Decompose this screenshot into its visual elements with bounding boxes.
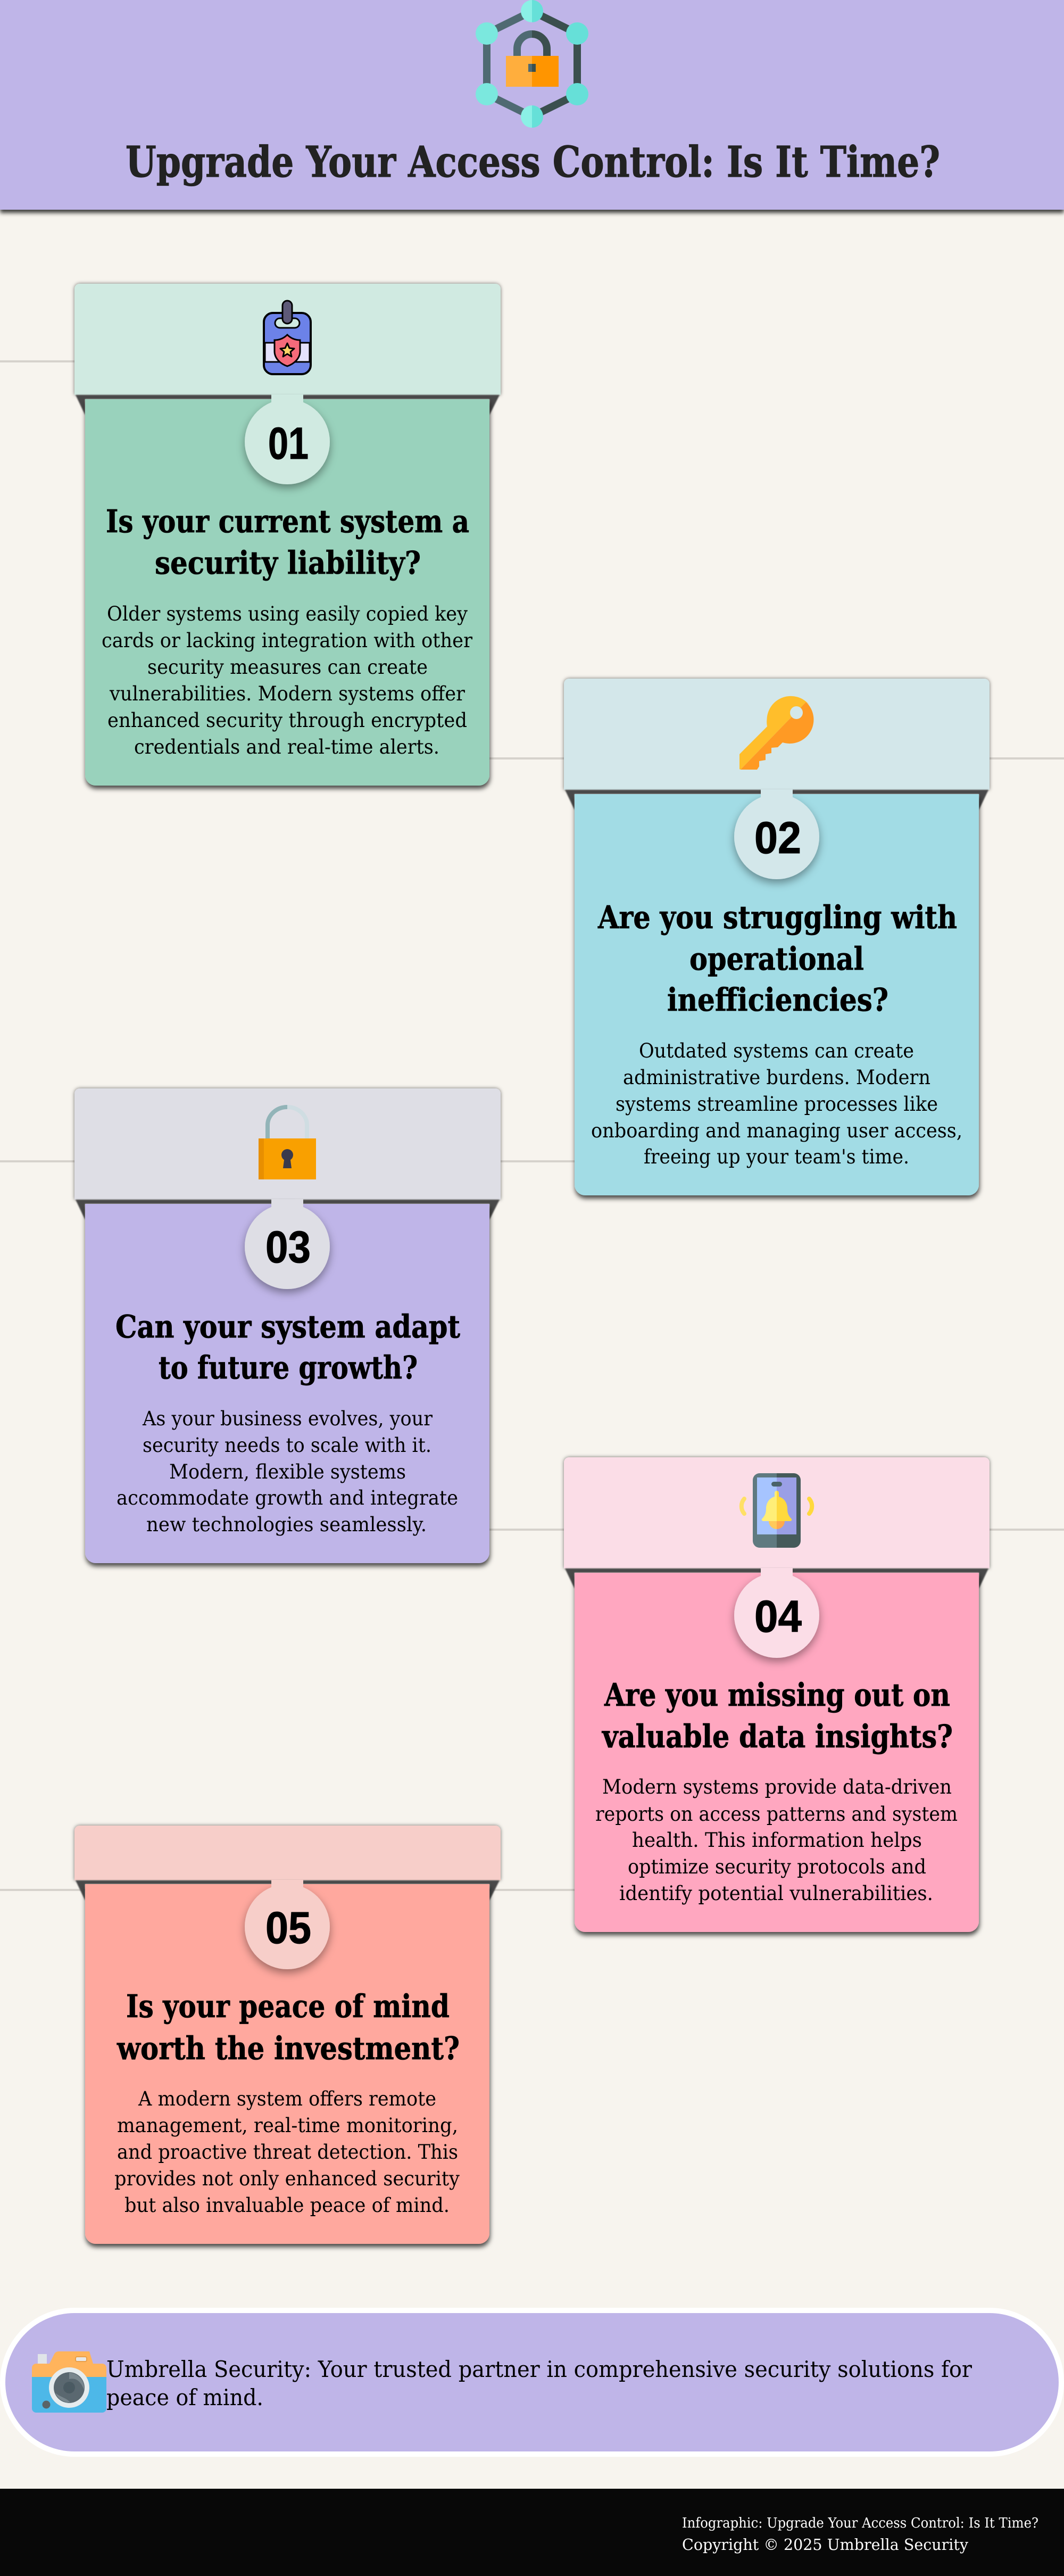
text block bbox=[117, 1407, 458, 1536]
number badge 05: 05 bbox=[265, 1903, 311, 1953]
number badge 02 bbox=[734, 789, 819, 879]
heading: Is your current system a bbox=[106, 503, 469, 540]
text block: management, real-time monitoring, bbox=[117, 2114, 458, 2137]
panel: card 03 bbox=[74, 1088, 501, 1563]
heading bbox=[601, 1677, 953, 1755]
panel: card 04 bbox=[564, 1457, 990, 1932]
text block: accommodate growth and integrate bbox=[117, 1487, 458, 1509]
heading bbox=[117, 1988, 460, 2067]
callout text bbox=[106, 2356, 972, 2410]
text block: but also invaluable peace of mind. bbox=[124, 2194, 450, 2217]
text block: As your business evolves, your bbox=[142, 1407, 433, 1430]
text block: and proactive threat detection. This bbox=[117, 2141, 458, 2164]
heading bbox=[115, 1308, 460, 1386]
panel: card 01 bbox=[74, 284, 501, 786]
text block: provides not only enhanced security bbox=[114, 2167, 460, 2190]
icon: camera bbox=[32, 2351, 106, 2413]
text block: administrative burdens. Modern bbox=[623, 1066, 930, 1089]
text block: Outdated systems can create bbox=[639, 1039, 914, 1062]
text block bbox=[595, 1776, 958, 1905]
text block: Modern systems provide data-driven bbox=[602, 1776, 952, 1798]
text block bbox=[591, 1039, 962, 1168]
heading: worth the investment? bbox=[117, 2030, 460, 2067]
text block: freeing up your team's time. bbox=[644, 1145, 909, 1168]
panel: card 05 bbox=[74, 1826, 501, 2244]
callout text: Umbrella Security: Your trusted partner in comprehensive security solutions for bbox=[106, 2356, 972, 2382]
text block: new technologies seamlessly. bbox=[146, 1513, 427, 1536]
heading bbox=[597, 899, 957, 1018]
panel: header bbox=[0, 0, 1064, 210]
heading: security liability? bbox=[155, 544, 421, 581]
heading: Are you missing out on bbox=[604, 1677, 950, 1713]
icon: padlock bbox=[259, 1107, 316, 1179]
callout text: peace of mind. bbox=[106, 2384, 263, 2410]
number badge 05 bbox=[245, 1880, 330, 1969]
heading: inefficiencies? bbox=[667, 981, 888, 1018]
text block: health. This information helps bbox=[632, 1829, 922, 1852]
text block: security measures can create bbox=[147, 656, 428, 679]
panel: card 02 bbox=[564, 679, 990, 1195]
text block bbox=[114, 2087, 460, 2217]
text block: optimize security protocols and bbox=[628, 1855, 926, 1878]
icon: security badge bbox=[264, 301, 311, 374]
footer bbox=[0, 2489, 1064, 2576]
footer text: source: Infographic: Upgrade Your Access Control: Is It Time? bbox=[682, 2515, 1038, 2531]
heading: valuable data insights? bbox=[601, 1718, 953, 1755]
number badge 03 bbox=[245, 1199, 330, 1289]
number badge 01: 01 bbox=[268, 418, 309, 468]
text block: Older systems using easily copied key bbox=[107, 602, 468, 625]
callout: Umbrella Security bbox=[3, 2310, 1061, 2454]
icon: network padlock bbox=[476, 0, 588, 128]
number badge 03: 03 bbox=[265, 1222, 311, 1272]
heading: Can your system adapt bbox=[115, 1308, 460, 1345]
number badge 04: 04 bbox=[754, 1591, 802, 1641]
text block: Modern, flexible systems bbox=[169, 1460, 406, 1483]
text block bbox=[102, 602, 472, 758]
text block: vulnerabilities. Modern systems offer bbox=[109, 682, 465, 705]
text block: systems streamline processes like bbox=[616, 1093, 938, 1116]
footer text: copyright: Copyright © 2025 Umbrella Security bbox=[682, 2536, 969, 2554]
text block: cards or lacking integration with other bbox=[102, 629, 472, 652]
heading: to future growth? bbox=[159, 1349, 418, 1386]
text block: credentials and real-time alerts. bbox=[134, 736, 439, 758]
number badge 04 bbox=[734, 1568, 819, 1658]
heading: Is your peace of mind bbox=[126, 1988, 450, 2025]
heading bbox=[106, 503, 469, 581]
text block: enhanced security through encrypted bbox=[107, 709, 467, 732]
number badge 02: 02 bbox=[754, 813, 801, 863]
number badge 01 bbox=[245, 394, 330, 484]
heading: operational bbox=[689, 940, 864, 977]
text block: identify potential vulnerabilities. bbox=[619, 1882, 933, 1905]
icon: key bbox=[739, 696, 813, 770]
text block: onboarding and managing user access, bbox=[591, 1119, 962, 1142]
text block: A modern system offers remote bbox=[138, 2087, 436, 2110]
text block: reports on access patterns and system bbox=[595, 1803, 958, 1826]
text block: security needs to scale with it. bbox=[143, 1434, 431, 1457]
heading: Are you struggling with bbox=[597, 899, 957, 936]
icon: phone with bell bbox=[742, 1473, 812, 1548]
